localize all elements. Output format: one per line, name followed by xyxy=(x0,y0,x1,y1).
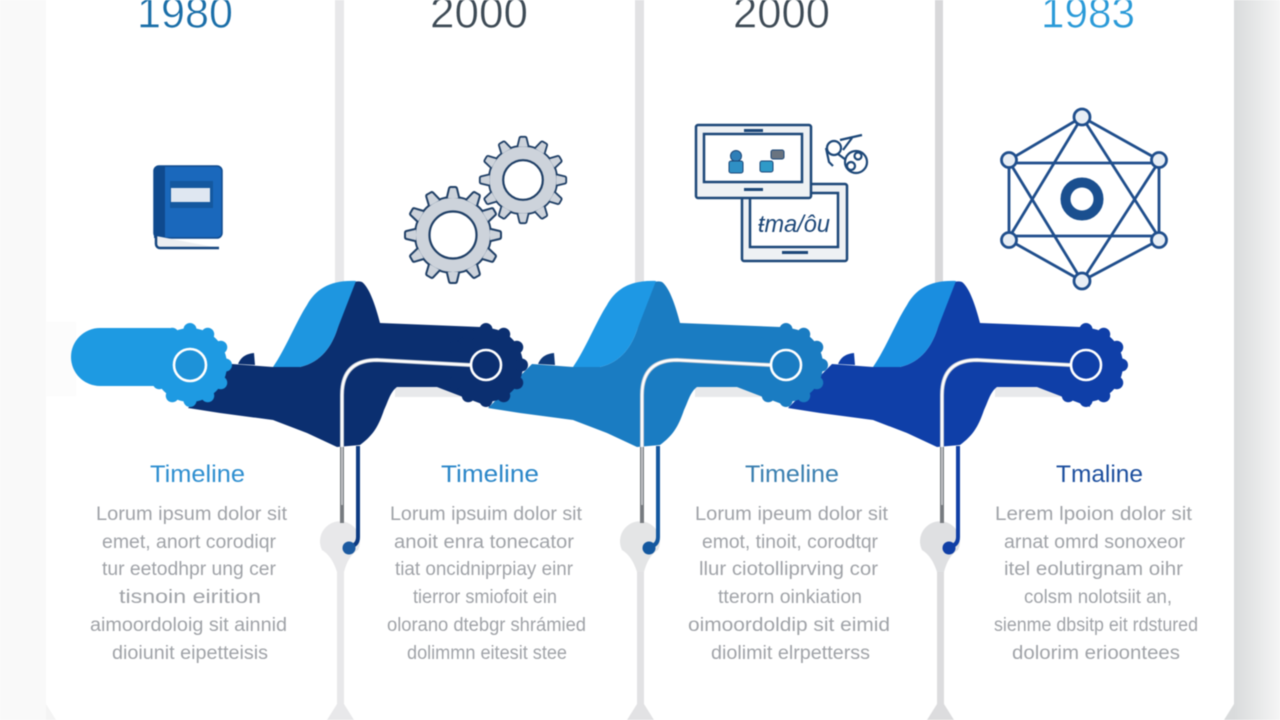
text block: column 4: dolorim erioontees xyxy=(1012,643,1180,664)
text block: column 3: llur ciotolliprving cor xyxy=(699,559,879,580)
gear: upper xyxy=(480,137,566,223)
icon: monitors xyxy=(696,125,867,261)
monitor: back screen xyxy=(742,184,847,261)
text block: column 3: Lorum ipeum dolor sit xyxy=(695,504,889,525)
panel: 2000 second xyxy=(688,0,890,664)
panel: 1980 xyxy=(90,0,288,664)
text block: column 2: anoit enra tonecator xyxy=(394,532,575,553)
text block: column 2: olorano dtebgr shrámied xyxy=(387,615,586,636)
monitor: front screen xyxy=(696,125,811,198)
heading: Timeline: Timeline xyxy=(150,461,245,488)
text block: column 2: dolimmn eitesit stee xyxy=(407,643,567,664)
text block: column 2: tierror smiofoit ein xyxy=(413,587,557,608)
text block: column 4 xyxy=(994,504,1198,664)
heading: Tmaline: Tmaline xyxy=(1056,461,1143,488)
icon: book xyxy=(154,166,222,248)
text block: column 4: arnat omrd sonoxeor xyxy=(1004,532,1186,553)
heading: Timeline: Timeline xyxy=(745,461,839,488)
text block: column 1: tur eetodhpr ung cer xyxy=(102,559,277,580)
text block: column 1 xyxy=(90,504,288,664)
panel: 1983 xyxy=(994,0,1198,664)
text block: column 2 xyxy=(387,504,586,664)
wrench connector 2 xyxy=(488,281,823,572)
text block: column 2: Lorum ipsuim dolor sit xyxy=(390,504,583,525)
text block: column 3: diolimit elrpetterss xyxy=(711,643,870,664)
text block: column 1: dioiunit eipetteisis xyxy=(112,643,268,664)
text block: column 1: tisnoin eirition xyxy=(119,587,261,608)
text block: column 3: tterorn oinkiation xyxy=(718,587,862,608)
icon: network hexagon xyxy=(1002,109,1166,289)
text block: column 4: itel eolutirgnam oihr xyxy=(1004,559,1184,580)
panel: 2000 first xyxy=(387,0,586,664)
text block: column 1: Lorum ipsum dolor sit xyxy=(96,504,288,525)
text block: column 1: aimoordoloig sit ainnid xyxy=(90,615,287,636)
text block: column 4: Lerem lpoion dolor sit xyxy=(995,504,1193,525)
start pill with gear xyxy=(71,328,227,402)
wrench connector 3 xyxy=(788,281,1123,572)
heading: Timeline: Timeline xyxy=(441,461,539,488)
text block: column 3: oimoordoldip sit eimid xyxy=(688,615,890,636)
text block: column 2: tiat oncidniprpiay einr xyxy=(395,559,574,580)
text block: column 4: colsm nolotsiit an, xyxy=(1024,587,1172,608)
monitor: back screen: ŧma/ôu xyxy=(758,211,830,238)
text block: column 1: emet, anort corodiqr xyxy=(102,532,277,553)
icon: molecule cluster xyxy=(826,135,867,173)
text block: column 3: emot, tinoit, corodtqr xyxy=(702,532,879,553)
icon: gears xyxy=(405,137,566,283)
wrench connector 1 xyxy=(188,281,523,572)
text block: column 4: sienme dbsitp eit rdstured xyxy=(994,615,1198,636)
gear: lower xyxy=(405,187,501,283)
text block: column 3 xyxy=(688,504,890,664)
